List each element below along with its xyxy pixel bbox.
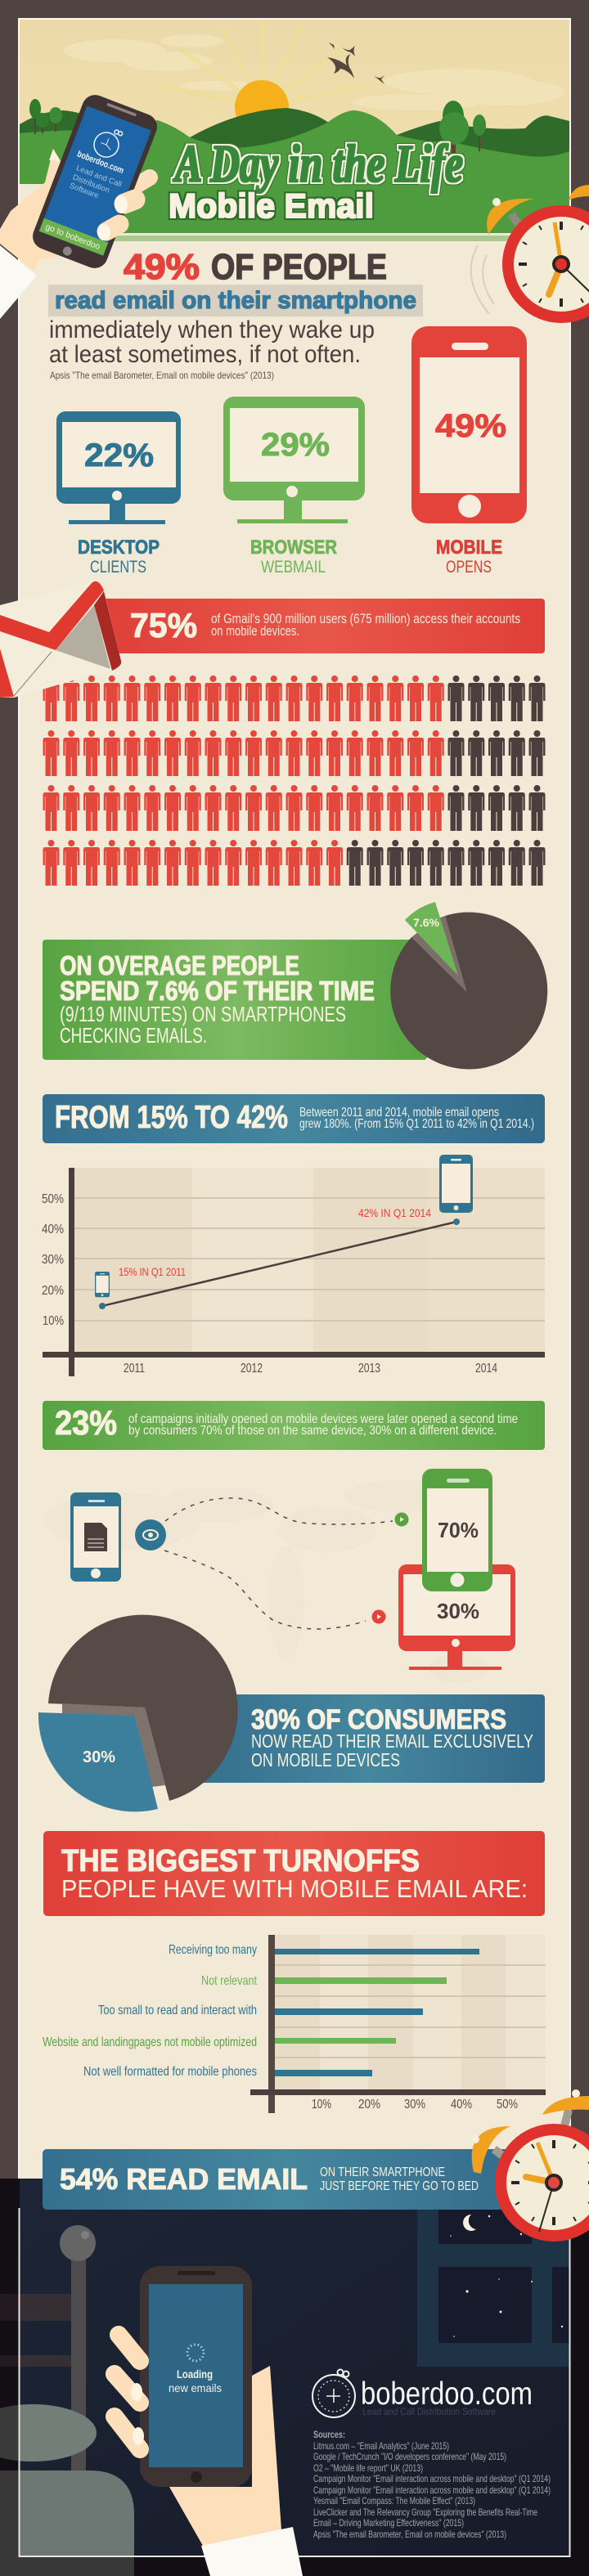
fingernails — [131, 2383, 144, 2445]
line chart: mobile email opens: 2014 — [475, 1362, 497, 1376]
red monitor 30%: 30% — [437, 1599, 479, 1623]
birds — [327, 43, 384, 84]
callout: 7.6% time: SPEND 7.6% OF THEIR TIME — [60, 976, 375, 1006]
source phone — [70, 1492, 121, 1582]
sources list: Yesmail "Email Compass: The Mobile Effect" (2013) — [313, 2495, 475, 2506]
line chart: mobile email opens: 2012 — [241, 1362, 263, 1376]
clouds — [64, 34, 564, 110]
cream corner under the hill left of hand — [20, 184, 82, 245]
callout: 54% read email: 54% READ EMAIL — [60, 2162, 308, 2196]
window — [417, 2179, 569, 2367]
night scene background — [0, 2179, 589, 2576]
bed — [0, 2225, 134, 2576]
callout: 75% gmail: on mobile devices. — [211, 623, 299, 639]
fingernails — [97, 195, 128, 240]
palm — [0, 149, 61, 272]
clock stems — [511, 214, 528, 237]
phone body: Software — [68, 182, 100, 200]
callout: 30% of consumers: ON MOBILE DEVICES — [251, 1749, 400, 1770]
bar chart: turnoffs: Website and landingpages not mobile optimized — [43, 2035, 257, 2049]
callout: 23% of campaigns: by consumers 70% of those on the same device, 30% on a different device. — [128, 1424, 497, 1438]
callout: 7.6% time: CHECKING EMAILS. — [60, 1023, 207, 1048]
green phone 70%: 70% — [438, 1518, 479, 1542]
mobile opens phone — [411, 326, 527, 523]
sleeve — [0, 245, 37, 319]
callout: 23% of campaigns: 23% — [55, 1403, 117, 1442]
alarm clock bottom — [471, 2089, 589, 2242]
heading: biggest turnoffs: THE BIGGEST TURNOFFS — [61, 1844, 420, 1878]
sun rays — [160, 20, 364, 107]
icon: gmail envelope — [0, 581, 121, 698]
sources list — [313, 2429, 551, 2540]
line chart: mobile email opens: 50% — [42, 1192, 64, 1206]
bar chart: turnoffs: Not relevant — [201, 1974, 257, 1988]
mobile opens phone: 49% — [435, 408, 506, 444]
fingers — [106, 200, 135, 231]
bar chart: turnoffs: Receiving too many — [169, 1943, 257, 1957]
intro text: at least sometimes, if not often. — [49, 341, 361, 368]
callout: 7.6% time: ON OVERAGE PEOPLE — [60, 950, 299, 981]
line chart: mobile email opens: 2013 — [358, 1362, 380, 1376]
header scene — [20, 20, 569, 245]
callout: 30% of consumers — [196, 1694, 545, 1783]
subtitle: Mobile Email — [169, 186, 374, 225]
source note: Apsis "The email Barometer, Email on mobile devices" (2013) — [50, 370, 274, 381]
pie chart: 7.6% — [390, 902, 547, 1069]
main green hill — [20, 110, 569, 233]
callout: 23% of campaigns — [43, 1401, 545, 1450]
sky — [20, 20, 569, 167]
line chart: mobile email opens: 2011 — [124, 1362, 145, 1376]
subheading band: read email on their smartphone — [55, 287, 416, 314]
callout: 75% gmail — [98, 599, 545, 653]
fingers — [115, 2335, 140, 2449]
intro text — [49, 316, 375, 368]
red monitor 30% — [398, 1564, 515, 1670]
device flow diagram — [70, 1469, 515, 1670]
people pictogram chart: 75 red of 100 — [43, 675, 545, 886]
faint world map — [45, 1480, 487, 1683]
heading: 49% of people — [124, 247, 387, 287]
bar chart: turnoffs: 50% — [497, 2098, 518, 2112]
callout: 75% gmail: 75% — [130, 606, 197, 644]
bar chart: turnoffs: 10% — [312, 2098, 331, 2112]
line chart: mobile email opens: 20% — [42, 1284, 64, 1298]
back hills — [20, 110, 98, 139]
header divider stripe — [82, 236, 569, 241]
sources list: Litmus.com – "Email Analytics" (June 2015) — [313, 2440, 449, 2452]
red marker — [371, 1609, 386, 1624]
clock bells — [487, 185, 589, 235]
sources list: Apsis "The email Barometer, Email on mobile devices" (2013) — [313, 2529, 506, 2540]
bar chart: turnoffs — [43, 1935, 546, 2113]
clock hands — [526, 2177, 554, 2183]
phone: Loading — [177, 2367, 213, 2381]
browser label — [250, 536, 337, 577]
callout: 54% read email — [43, 2149, 533, 2210]
bar chart: turnoffs: 30% — [404, 2098, 425, 2112]
row 2 — [43, 730, 545, 776]
sources list: Google / TechCrunch "I/O developers conference" (May 2015) — [313, 2451, 506, 2462]
panel border — [20, 2208, 569, 2556]
pie chart: 30% — [38, 1615, 238, 1811]
callout: from 15% to 42%: FROM 15% TO 42% — [55, 1100, 288, 1135]
callout: 54% read email: JUST BEFORE THEY GO TO BED — [320, 2179, 479, 2193]
line chart: mobile email opens — [42, 1155, 545, 1376]
intro text: immediately when they wake up — [49, 316, 375, 343]
line chart: mobile email opens: 10% — [43, 1314, 64, 1328]
sun — [235, 80, 289, 134]
bar chart: turnoffs: Too small to read and interact with — [98, 2004, 257, 2017]
hand holding phone at night — [115, 2266, 303, 2576]
clock hands — [555, 222, 561, 264]
sound waves — [471, 245, 494, 314]
green marker — [394, 1513, 409, 1526]
bar chart: turnoffs: 20% — [358, 2098, 380, 2112]
trees — [29, 99, 486, 164]
main cream panel — [19, 19, 570, 2194]
sources list: O2 – "Mobile life report" UK (2013) — [313, 2462, 423, 2474]
browser label: WEBMAIL — [261, 558, 326, 577]
green phone 70% — [422, 1469, 492, 1591]
callout: 75% gmail: of Gmail's 900 million users (675 million) access their accounts — [211, 611, 520, 626]
mobile label — [436, 536, 502, 577]
callout: 7.6% time — [43, 940, 427, 1060]
phone body — [29, 91, 161, 272]
row 1 — [43, 675, 545, 721]
desktop label: CLIENTS — [90, 558, 146, 577]
dashed arrow to same device — [165, 1498, 393, 1524]
sources list: Sources: — [313, 2429, 345, 2440]
line chart: mobile email opens: 40% — [42, 1223, 64, 1236]
line chart: mobile email opens: 30% — [42, 1253, 64, 1267]
boberdoo logo: boberdoo.com — [361, 2376, 533, 2412]
desktop label: DESKTOP — [78, 536, 160, 559]
phone — [140, 2266, 252, 2487]
pie chart: 7.6%: 7.6% — [413, 916, 440, 929]
phone body: go to boberdoo — [44, 222, 101, 252]
heading: biggest turnoffs: PEOPLE HAVE WITH MOBILE EMAIL ARE: — [61, 1874, 528, 1903]
stopwatch icon — [312, 2370, 355, 2417]
thumb and palm — [169, 2366, 281, 2546]
eye icon — [135, 1519, 166, 1551]
bar chart: turnoffs: 40% — [451, 2098, 472, 2112]
heading: 49% of people: 49% — [124, 247, 200, 287]
desktop clients monitor — [56, 411, 181, 524]
dark outer overlay — [0, 2179, 589, 2576]
title: A Day in the Life — [173, 134, 463, 194]
browser label: BROWSER — [250, 536, 337, 559]
thumb tip — [49, 149, 61, 161]
line chart: mobile email opens: 15% IN Q1 2011 — [119, 1265, 186, 1278]
pie chart: 30%: 30% — [83, 1748, 115, 1766]
back finger — [137, 177, 150, 185]
line chart: mobile email opens: 42% IN Q1 2014 — [358, 1206, 431, 1219]
callout: 7.6% time: (9/119 MINUTES) ON SMARTPHONES — [60, 1002, 346, 1026]
row 3 — [43, 785, 545, 831]
callout: 23% of campaigns: of campaigns initially opened on mobile devices were later opened a second time — [128, 1412, 518, 1426]
callout: from 15% to 42%: Between 2011 and 2014, mobile email opens — [299, 1106, 499, 1120]
row 4 — [43, 840, 545, 886]
phone: new emails — [169, 2381, 222, 2394]
browser webmail monitor: 29% — [261, 427, 330, 463]
phone body: Lead and Call — [75, 164, 123, 189]
phone body: Distribution — [71, 173, 111, 195]
boberdoo logo: Lead and Call Distribution Software — [362, 2406, 496, 2417]
mobile label: MOBILE — [436, 536, 502, 559]
heading: 49% of people: OF PEOPLE — [211, 247, 387, 287]
dashed arrow to other device — [164, 1551, 366, 1629]
clock bells — [472, 2096, 589, 2174]
browser webmail monitor — [223, 397, 365, 523]
boberdoo logo — [312, 2370, 533, 2417]
callout: 54% read email: ON THEIR SMARTPHONE — [320, 2165, 445, 2179]
sleeve — [201, 2527, 303, 2576]
mobile label: OPENS — [446, 558, 492, 577]
callout: from 15% to 42% — [43, 1094, 545, 1143]
callout: 30% of consumers: 30% OF CONSUMERS — [251, 1704, 506, 1735]
heading: biggest turnoffs — [43, 1831, 545, 1916]
bar chart: turnoffs: Not well formatted for mobile phones — [83, 2065, 257, 2079]
alarm clock top — [487, 185, 589, 323]
desktop clients monitor: 22% — [84, 438, 154, 473]
sources list: Email – Driving Marketing Effectiveness" (2015) — [313, 2517, 464, 2529]
icon: hand holding phone — [0, 91, 161, 319]
desktop label — [78, 536, 160, 577]
phone body: boberdoo.com — [76, 150, 125, 176]
clock stems — [494, 2110, 569, 2161]
